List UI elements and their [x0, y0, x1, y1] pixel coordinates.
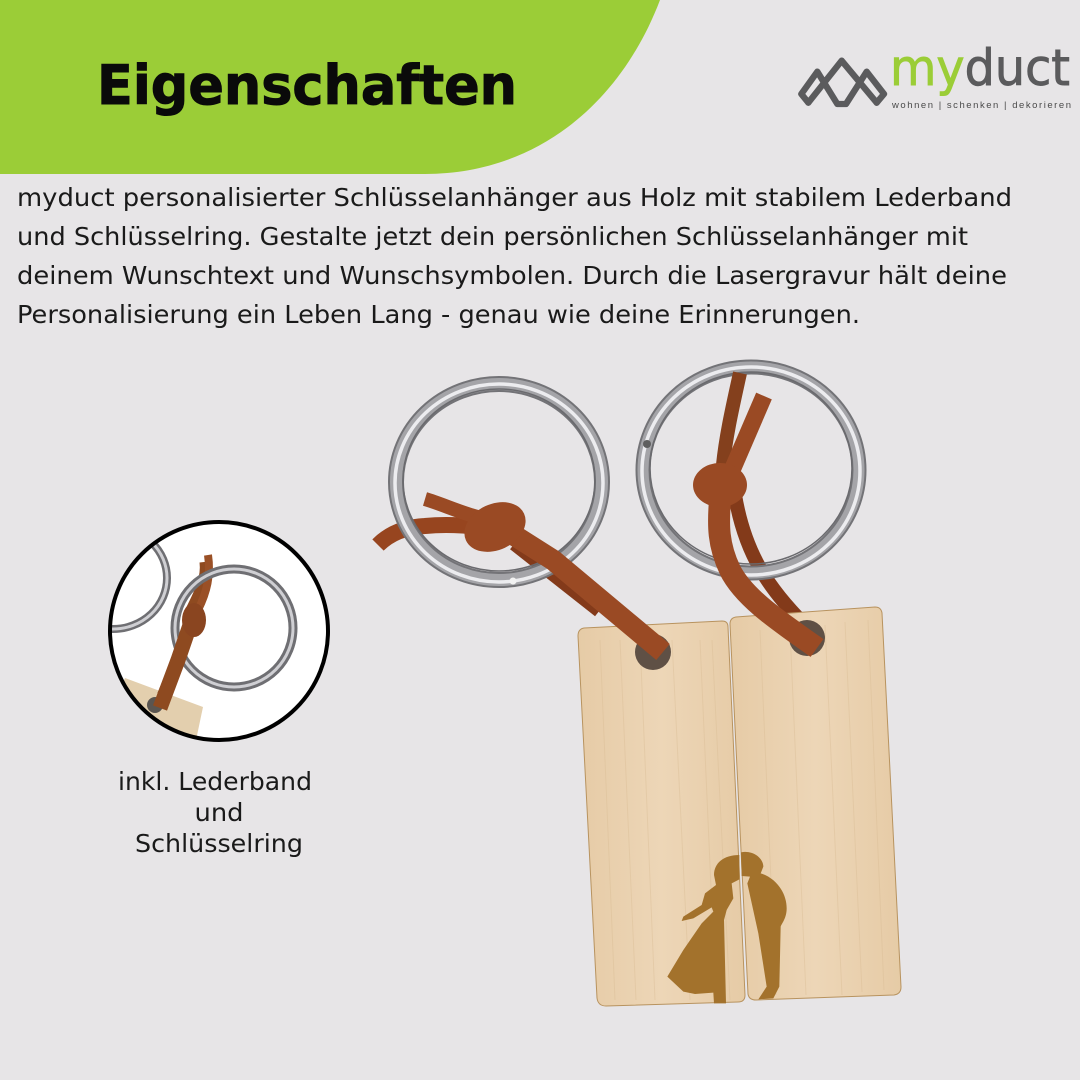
left wooden tag — [578, 621, 745, 1006]
left leather strap behind ring — [378, 525, 600, 610]
inset circle: leather strap and key ring detail — [108, 520, 330, 742]
caption: und — [194, 798, 244, 827]
right knot — [693, 463, 747, 507]
man silhouette — [741, 852, 787, 999]
right wooden tag — [730, 607, 901, 1000]
caption — [118, 767, 312, 858]
woman silhouette — [667, 855, 739, 1003]
left leather strap front — [425, 493, 663, 652]
logo wordmark: myduct — [890, 39, 1070, 97]
right key ring — [642, 367, 860, 575]
laser engraved kissing couple — [667, 852, 787, 1003]
caption: inkl. Lederband — [118, 767, 312, 796]
right leather strap behind ring — [735, 495, 805, 625]
logo: myduct — [801, 39, 1071, 111]
caption: Schlüsselring — [135, 829, 303, 858]
right leather strap front — [693, 373, 817, 648]
intro text block — [17, 183, 1012, 329]
logo tagline: wohnen | schenken | dekorieren — [891, 100, 1071, 111]
intro text block: und Schlüsselring. Gestalte jetzt dein persönlichen Schlüsselanhänger mit — [17, 222, 968, 251]
intro text block: Personalisierung ein Leben Lang - genau wie deine Erinnerungen. — [17, 300, 860, 329]
green header shape — [0, 0, 660, 174]
left key ring — [395, 384, 603, 584]
icon: mountain logo mark — [801, 61, 884, 104]
intro text block: myduct personalisierter Schlüsselanhänger aus Holz mit stabilem Lederband — [17, 183, 1012, 212]
intro text block: deinem Wunschtext und Wunschsymbolen. Durch die Lasergravur hält deine — [17, 261, 1007, 290]
title: Eigenschaften — [97, 54, 517, 117]
left knot — [456, 493, 534, 561]
